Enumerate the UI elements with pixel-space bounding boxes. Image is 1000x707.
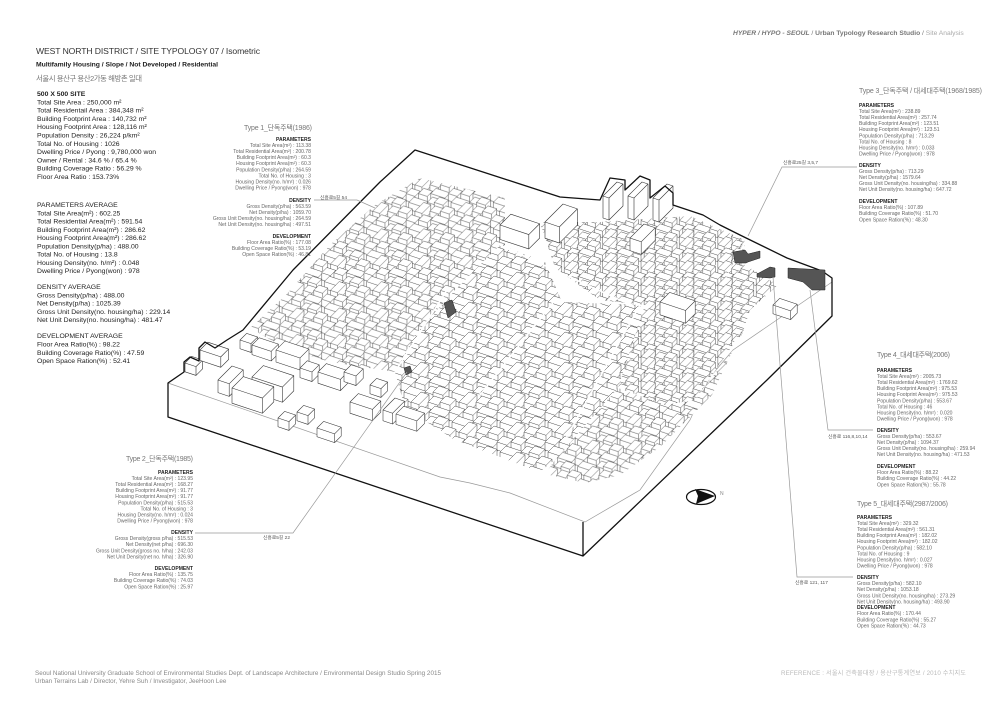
text block: 500 x 500 site summary: Total Residentail Area : 384,348 m²: [37, 108, 144, 115]
development: Building Coverage Ratio(%) : 55.27: [857, 617, 936, 623]
density: Net Unit Density(net no. h/ha) : 326.90: [107, 554, 193, 560]
development: Building Coverage Ratio(%) : 74.03: [114, 578, 193, 584]
parameters: Housing Density(no. h/m²) : 0.020: [877, 410, 953, 416]
text block: density average: DENSITY AVERAGE: [37, 284, 101, 291]
parameters: PARAMETERS: [877, 368, 913, 374]
text block: parameters average: Total Residential Area(m²) : 591.54: [37, 218, 143, 226]
parameters: Total Residential Area(m²) : 168.27: [115, 482, 193, 488]
panel: type 2: [96, 454, 194, 590]
parameters: Dwelling Price / Pyong(won) : 978: [859, 151, 935, 157]
density: Gross Density(p/ha) : 563.59: [246, 204, 311, 210]
text block: development average: Open Space Ration(%) : 52.41: [37, 358, 130, 365]
text block: parameters average: Total No. of Housing : 13.8: [37, 252, 118, 258]
density: DENSITY: [857, 575, 880, 581]
panel: type 3: [859, 86, 982, 223]
highlighted building: type 2: [404, 366, 412, 375]
parameters: Housing Footprint Area(m²) : 975.53: [877, 392, 958, 398]
parameters: Total Site Area(m²) : 123.95: [132, 476, 193, 482]
parameters: PARAMETERS: [857, 515, 893, 521]
heading: Type 5_대세대주택(2987/2006): [857, 499, 948, 508]
parameters: Housing Footprint Area(m²) : 182.02: [857, 539, 938, 545]
density: DENSITY: [289, 198, 312, 204]
development: Open Space Ration(%) : 25.97: [124, 584, 193, 590]
development: Building Coverage Ratio(%) : 44.22: [877, 476, 956, 482]
text block: density average: Net Density(p/ha) : 1025.39: [37, 300, 121, 308]
title: WEST NORTH DISTRICT / SITE TYPOLOGY 07 / Isometric: [36, 46, 261, 56]
parameters: Total No. of Housing : 9: [857, 551, 910, 557]
parameters: Population Density(p/ha) : 582.10: [857, 545, 932, 551]
parameters: Dwelling Price / Pyong(won) : 978: [877, 416, 953, 422]
leader label: type 4: 신흥로 116,8,10,14: [828, 433, 868, 440]
terrain front edge: [168, 282, 832, 522]
leader line: type 5: [773, 277, 853, 577]
parameters: Housing Density(no. h/m²) : 0.033: [859, 145, 935, 151]
parameters: Population Density(p/ha) : 264.59: [236, 167, 311, 173]
parameters: Housing Footprint Area(m²) : 60.3: [236, 161, 311, 167]
parameters: Housing Density(no. h/m²) : 0.024: [118, 512, 193, 518]
text block: 500 x 500 site summary: Population Density : 26,224 p/km²: [37, 132, 140, 140]
density: Gross Unit Density(no. housing/ha) : 273.29: [857, 593, 955, 599]
development: DEVELOPMENT: [273, 234, 312, 240]
development: Floor Area Ratio(%) : 135.75: [129, 572, 193, 578]
text block: 500 x 500 site summary: Owner / Rental : 34.6 % / 65.4 %: [37, 157, 137, 164]
isometric site model: [168, 150, 832, 556]
density: DENSITY: [859, 163, 882, 169]
density: Gross Density(gross p/ha) : 515.53: [115, 536, 193, 542]
parameters: Total No. of Housing : 8: [859, 139, 912, 145]
development: Floor Area Ratio(%) : 88.22: [877, 470, 938, 476]
icon: north compass: [686, 489, 724, 504]
development: Floor Area Ratio(%) : 107.89: [859, 205, 923, 211]
text block: parameters average: Housing Footprint Area(m²) : 286.62: [37, 235, 146, 242]
leader line: type 2: [195, 372, 407, 533]
leader line: type 1: [314, 200, 375, 208]
parameters: Dwelling Price / Pyong(won) : 978: [117, 518, 193, 524]
leader line: type 3: [748, 167, 857, 236]
development: Floor Area Ratio(%) : 170.44: [857, 611, 921, 617]
parameters: Total Site Area(m²) : 238.89: [859, 109, 921, 115]
text block: density average: Gross Unit Density(no. housing/ha) : 229.14: [37, 309, 170, 316]
density: Net Unit Density(no. housing/ha) : 647.72: [859, 187, 952, 193]
density: Gross Unit Density(no. housing/ha) : 334.88: [859, 181, 957, 187]
text block: density average: Gross Density(p/ha) : 488.00: [37, 292, 125, 299]
text block: 500 x 500 site summary: 500 X 500 SITE: [37, 91, 86, 98]
text block: parameters average: Housing Density(no. h/m²) : 0.048: [37, 260, 140, 267]
density: Net Density(p/ha) : 1059.70: [249, 210, 311, 216]
development: Building Coverage Ratio(%) : 51.70: [859, 211, 938, 217]
parameters: Dwelling Price / Pyong(won) : 978: [857, 563, 933, 569]
parameters: Total Residential Area(m²) : 257.74: [859, 115, 937, 121]
central large buildings: [500, 204, 797, 323]
density: Net Density(p/ha) : 1053.18: [857, 587, 919, 593]
parameters: Building Footprint Area(m²) : 975.53: [877, 386, 957, 392]
tall buildings at back edge: [603, 182, 673, 222]
parameters: Dwelling Price / Pyong(won) : 978: [235, 185, 311, 191]
density: DENSITY: [171, 530, 194, 536]
parameters: Building Footprint Area(m²) : 60.3: [237, 155, 311, 161]
parameters: Housing Footprint Area(m²) : 123.51: [859, 127, 940, 133]
parameters: Total No. of Housing : 3: [141, 506, 193, 512]
text block: 500 x 500 site summary: Dwelling Price / Pyong : 9,780,000 won: [37, 149, 156, 156]
parameters: Building Footprint Area(m²) : 123.51: [859, 121, 939, 127]
leader label: type 1: 신흥로5길 54: [320, 194, 347, 201]
text block: parameters average: Total Site Area(m²) : 602.25: [37, 210, 120, 217]
leader label: type 2: 신흥로5길 22: [263, 534, 290, 541]
density: Net Unit Density(no. housing/ha) : 497.51: [218, 222, 311, 228]
heading: Type 1_단독주택(1986): [244, 123, 312, 132]
parameters: Building Footprint Area(m²) : 182.02: [857, 533, 937, 539]
streets: [395, 245, 640, 440]
leader line: type 4: [810, 290, 873, 430]
text block: 500 x 500 site summary: Floor Area Ratio : 153.73%: [37, 174, 119, 181]
density: Gross Density(p/ha) : 582.10: [857, 581, 922, 587]
parameters: PARAMETERS: [859, 103, 895, 109]
text block: parameters average: PARAMETERS AVERAGE: [37, 202, 118, 209]
heading: Type 2_단독주택(1985): [126, 454, 193, 463]
parameters: Total Site Area(m²) : 2005.73: [877, 374, 941, 380]
parameters: Total Residential Area(m²) : 561.31: [857, 527, 935, 533]
development: DEVELOPMENT: [877, 464, 916, 470]
panel: type 1: [213, 123, 312, 258]
parameters: Population Density(p/ha) : 713.29: [859, 133, 934, 139]
development: Floor Area Ratio(%) : 177.08: [247, 240, 311, 246]
parameters: Housing Footprint Area(m²) : 91.77: [115, 494, 193, 500]
text block: development average: Floor Area Ratio(%) : 98.22: [37, 341, 120, 348]
text block: 500 x 500 site summary: Total Site Area : 250,000 m²: [37, 99, 122, 106]
highlighted buildings: type 4: [788, 268, 825, 290]
parameters: Total Residential Area(m²) : 200.78: [233, 149, 311, 155]
parameters: Total Site Area(m²) : 113.38: [250, 143, 311, 149]
text block: 500 x 500 site summary: Building Footprint Area : 140,732 m²: [37, 116, 147, 123]
panel: type 4: [877, 350, 975, 488]
location in Korean: 서울시 용산구 용산2가동 해방촌 일대: [36, 74, 142, 83]
parameters: Total No. of Housing : 46: [877, 404, 932, 410]
development: Open Space Ration(%) : 48.30: [859, 217, 928, 223]
footer credit: Seoul National University Graduate School of Environmental Studies Dept. of Landscape Architecture / Environmental Design Studio Spring 2015: [35, 670, 441, 677]
highlighted buildings: type 5: [757, 267, 775, 278]
development: Open Space Ration(%) : 44.73: [857, 624, 926, 630]
text block: development average: DEVELOPMENT AVERAGE: [37, 333, 123, 340]
density: Gross Density(p/ha) : 713.29: [859, 169, 924, 175]
development: Open Space Ration(%) : 55.78: [877, 482, 946, 488]
text block: development average: Building Coverage Ratio(%) : 47.59: [37, 350, 144, 357]
footer reference: REFERENCE : 서울시 건축물대장 / 용산구통계연보 / 2010 수치지도: [781, 669, 966, 677]
subtitle: Multifamily Housing / Slope / Not Developed / Residential: [36, 62, 218, 68]
density: Gross Unit Density(gross no. h/ha) : 242.03: [96, 548, 193, 554]
leader label: type 3: 신흥로25길 3,5,7: [783, 159, 818, 166]
site outline: [168, 150, 832, 556]
density: Net Unit Density(no. housing/ha) : 493.90: [857, 599, 950, 605]
text block: 500 x 500 site summary: Building Coverage Ratio : 56.29 %: [37, 166, 142, 173]
density: Net Density(p/ha) : 1579.64: [859, 175, 921, 181]
parameters: Total No. of Housing : 3: [259, 173, 311, 179]
highlighted building: type 1: [444, 300, 456, 318]
text block: density average: Net Unit Density(no. housing/ha) : 481.47: [37, 317, 163, 324]
parameters: Housing Density(no. h/m²) : 0.027: [857, 557, 933, 563]
text block: 500 x 500 site summary: Housing Footprint Area : 128,116 m²: [37, 124, 148, 131]
text block: 500 x 500 site summary: Total No. of Housing : 1026: [37, 141, 120, 148]
development: DEVELOPMENT: [857, 605, 896, 611]
text block: parameters average: Building Footprint Area(m²) : 286.62: [37, 227, 146, 234]
parameters: Housing Density(no. h/m²) : 0.026: [236, 179, 311, 185]
heading: Type 3_단독주택 / 대세대주택(1968/1985): [859, 86, 982, 95]
parameters: Building Footprint Area(m²) : 91.77: [116, 488, 193, 494]
footer credit: Urban Terrains Lab / Director, Yehre Suh / Investigator, JeeHoon Lee: [35, 678, 227, 685]
density: Gross Unit Density(no. housing/ha) : 264.59: [213, 216, 311, 222]
density: Gross Unit Density(no. housing/ha) : 259.94: [877, 446, 975, 452]
text block: parameters average: Dwelling Price / Pyong(won) : 978: [37, 268, 140, 275]
density: Net Unit Density(no. housing/ha) : 471.53: [877, 452, 970, 458]
parameters: Population Density(p/ha) : 515.53: [118, 500, 193, 506]
parameters: Total Residential Area(m²) : 1769.62: [877, 380, 958, 386]
parameters: PARAMETERS: [158, 470, 194, 476]
highlighted buildings: type 3: [733, 250, 760, 263]
panel: type 5: [857, 499, 955, 630]
density: Gross Density(p/ha) : 553.67: [877, 434, 942, 440]
development: Open Space Ration(%) : 46.81: [242, 252, 311, 258]
density: Net Density(p/ha) : 1094.37: [877, 440, 939, 446]
text block: parameters average: Population Density(p/ha) : 488.00: [37, 243, 139, 250]
development: Building Coverage Ratio(%) : 53.19: [232, 246, 311, 252]
parameters: PARAMETERS: [276, 137, 312, 143]
building zones: [250, 178, 778, 483]
lower-left detached buildings: [185, 333, 425, 443]
icon: north compass: N: [720, 491, 724, 497]
heading: Type 4_대세대주택(2006): [877, 350, 950, 359]
development: DEVELOPMENT: [155, 566, 194, 572]
density: DENSITY: [877, 428, 900, 434]
parameters: Population Density(p/ha) : 553.67: [877, 398, 952, 404]
density: Net Density(net p/ha) : 696.30: [126, 542, 193, 548]
header: studio credit: HYPER / HYPO - SEOUL / Urban Typology Research Studio / Site Analysis: [733, 30, 964, 37]
parameters: Total Site Area(m²) : 329.32: [857, 521, 919, 527]
development: DEVELOPMENT: [859, 199, 898, 205]
leader label: type 5: 신흥로 121, 117: [795, 579, 828, 586]
